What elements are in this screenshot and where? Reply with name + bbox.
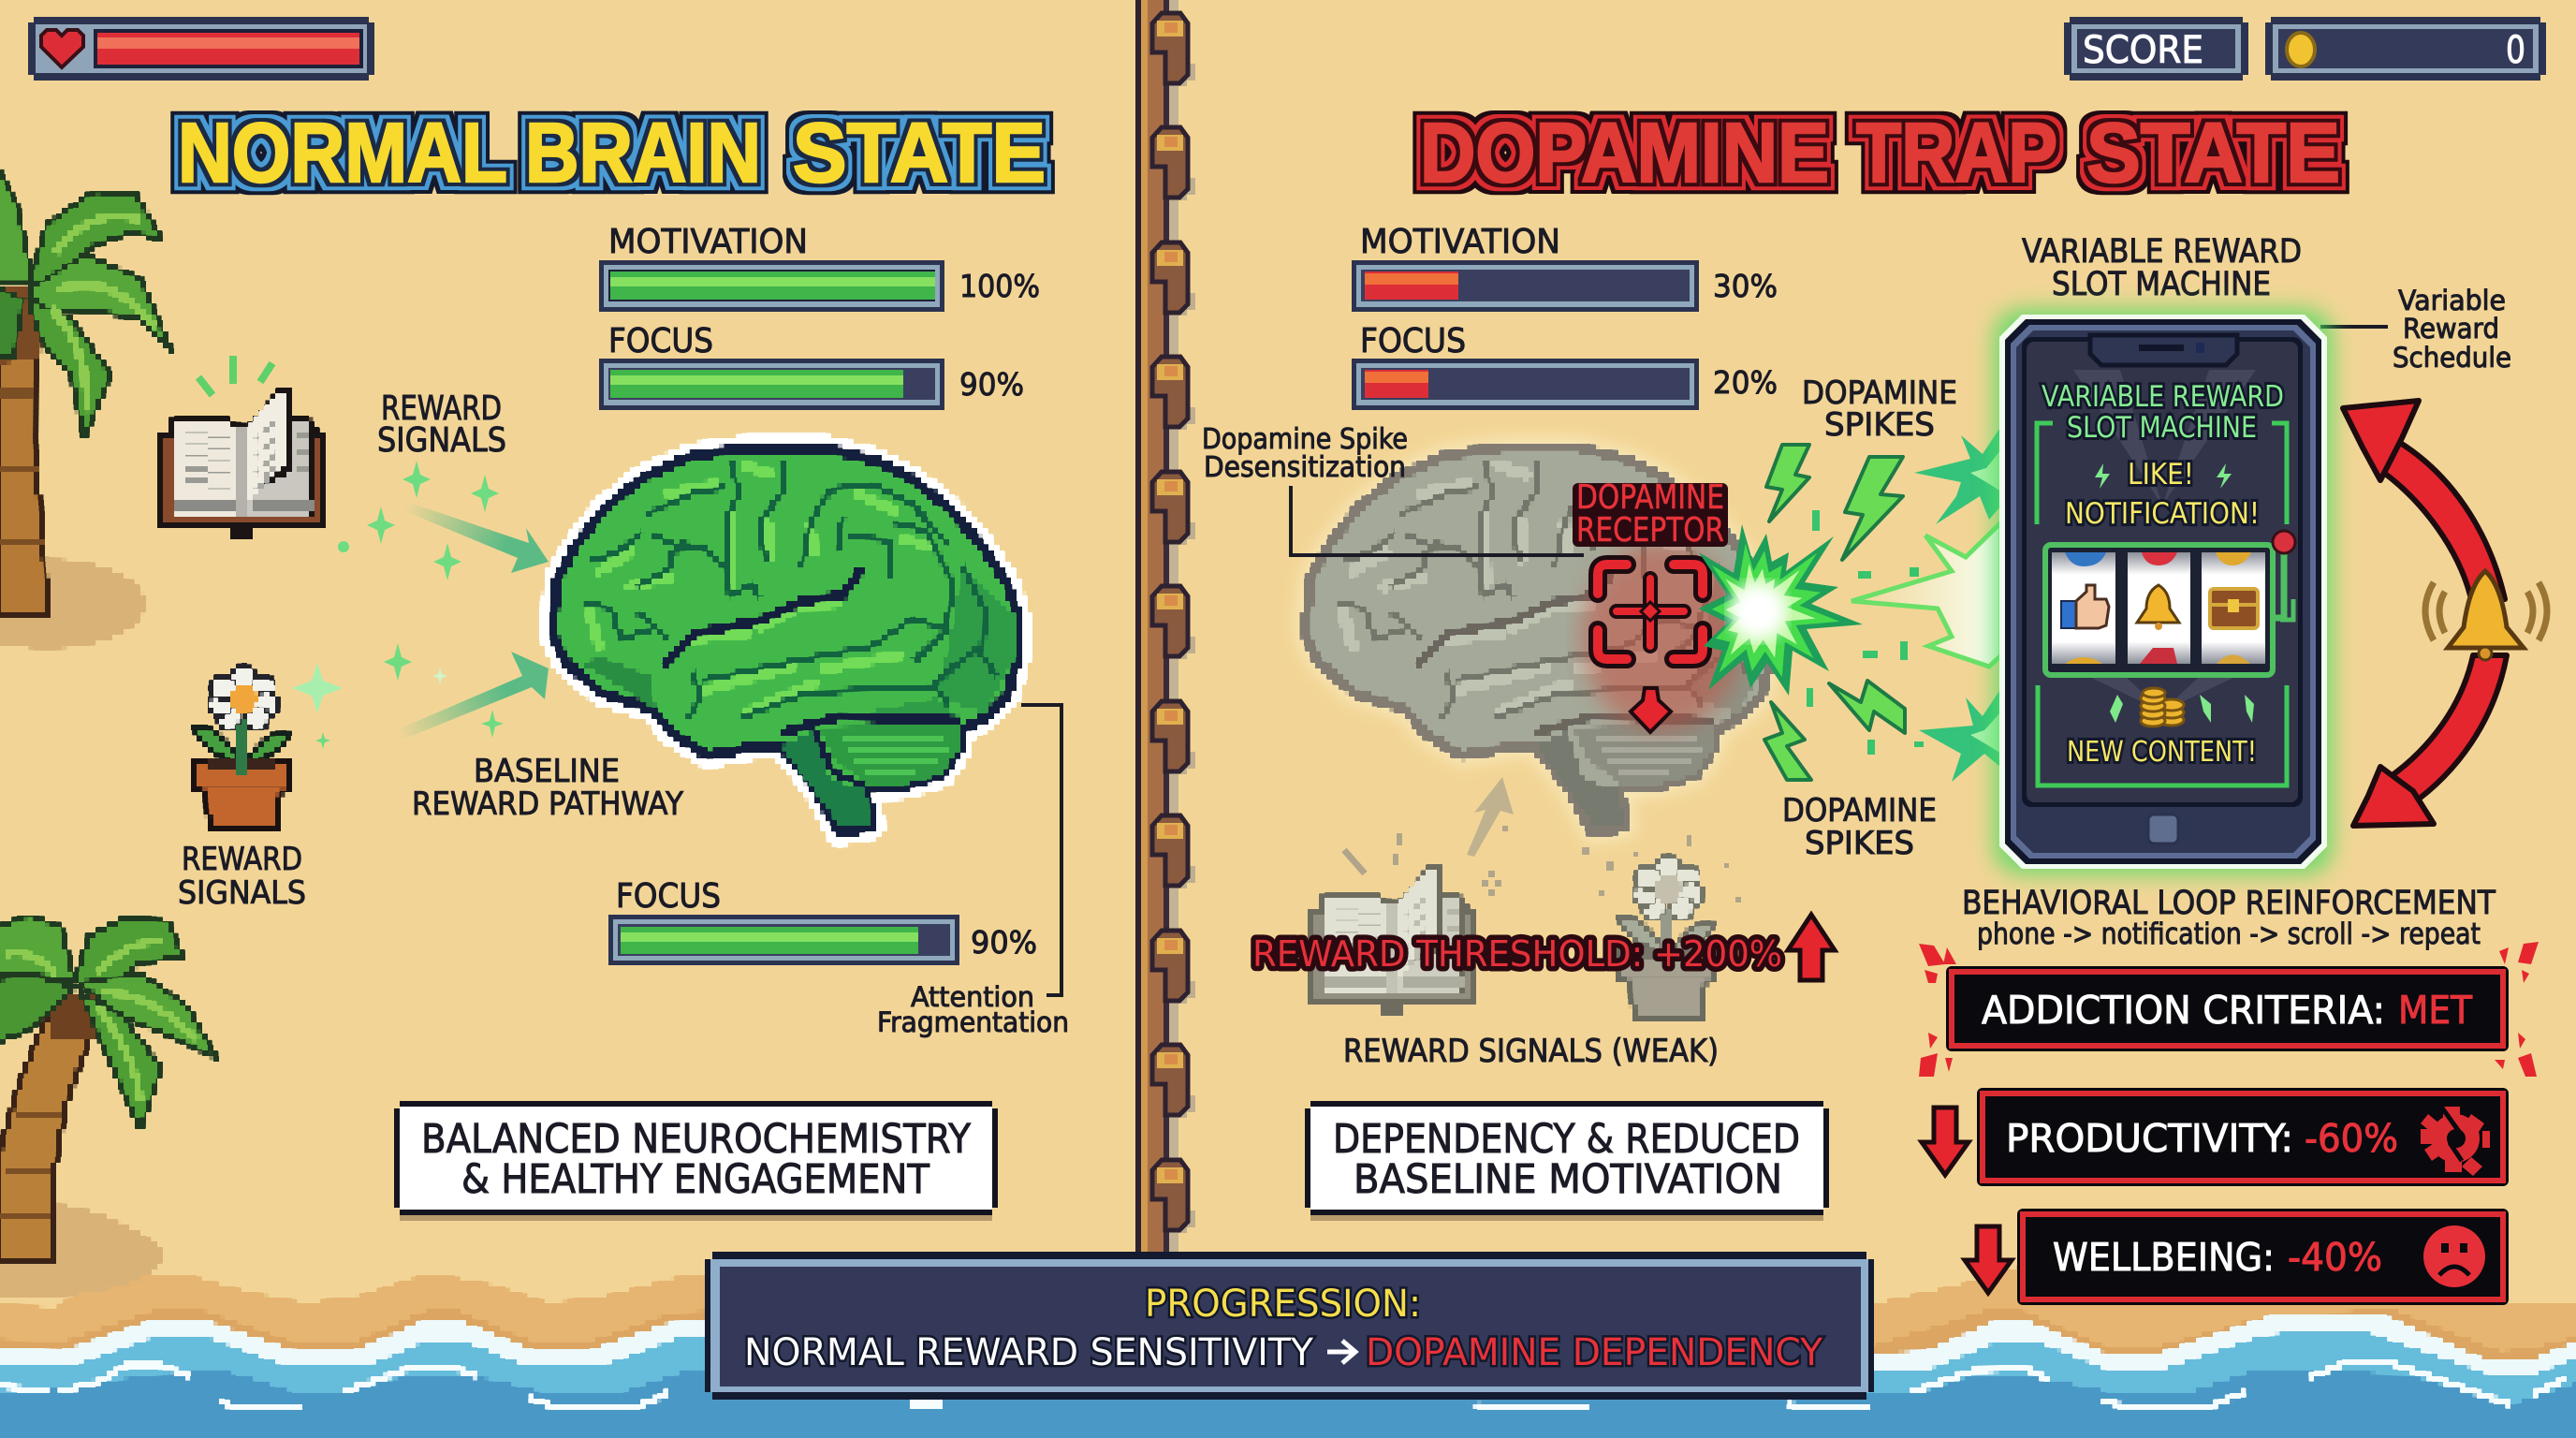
panel: balanced neurochemistry: BALANCED NEUROCHEMISTRY <box>421 1116 972 1163</box>
callout: dopamine spike desensitization <box>1202 423 1584 555</box>
callout: reward threshold: REWARD THRESHOLD: +200% <box>1252 933 1782 975</box>
title: dopamine trap state: TRAP <box>1856 107 2057 200</box>
label: behavioral loop: phone -> notification -> scroll -> repeat <box>1977 917 2481 951</box>
label: dopamine receptor: DOPAMINE <box>1576 478 1724 517</box>
status bar: health <box>28 17 374 81</box>
label: reward signals weak: REWARD SIGNALS (WEAK) <box>1343 1033 1719 1070</box>
phone: slot machine: VARIABLE REWARD <box>2042 380 2284 414</box>
icon: broken gear <box>2421 1107 2490 1176</box>
title: normal brain state: BRAIN <box>525 107 761 200</box>
palm tree: top left <box>0 172 171 649</box>
palm tree: bottom left <box>0 916 216 1299</box>
label: variable reward slot machine: SLOT MACHINE <box>2052 266 2271 303</box>
icon: home button <box>2148 814 2178 844</box>
callout: attention fragmentation: Fragmentation <box>877 1006 1069 1038</box>
panel: progression banner <box>705 1252 1874 1400</box>
label: dopamine spikes lower <box>1782 792 1937 862</box>
phone: slot machine: SLOT MACHINE <box>2067 411 2257 445</box>
label: dopamine receptor: RECEPTOR <box>1576 511 1724 550</box>
panel: productivity: -60% <box>2305 1116 2398 1161</box>
icon: open book <box>159 389 326 537</box>
label: behavioral loop: BEHAVIORAL LOOP REINFORCEMENT <box>1962 885 2496 922</box>
motivation meter: normal: MOTIVATION <box>608 223 808 261</box>
beach and waves <box>0 1255 2576 1438</box>
arrow: upper reward signal <box>402 502 549 573</box>
panel: addiction criteria: ADDICTION CRITERIA: <box>1982 988 2385 1033</box>
focus meter: trap <box>1352 322 1778 410</box>
phone: slot machine <box>1999 315 2327 869</box>
arrow: lower reward signal <box>396 652 549 740</box>
label: dopamine receptor <box>1573 478 1728 550</box>
icon: sad face <box>2423 1225 2485 1287</box>
phone: slot machine: NOTIFICATION! <box>2065 497 2260 531</box>
label: dopamine spikes upper <box>1802 374 1957 444</box>
arrow: loop lower <box>2353 655 2507 826</box>
label: reward signals upper: SIGNALS <box>377 421 506 460</box>
icon: receptor reticle <box>1598 565 1703 659</box>
motivation meter: normal <box>599 223 1040 312</box>
score counter <box>2265 17 2546 81</box>
arrow: receptor down <box>1631 688 1671 732</box>
focus meter: trap: 20% <box>1713 364 1778 401</box>
score counter: 0 <box>2506 29 2525 72</box>
arrow: progression <box>1327 1341 1355 1363</box>
phone green frames <box>2037 423 2287 785</box>
book sparks <box>198 356 272 395</box>
panel: wellbeing: WELLBEING: <box>2053 1235 2275 1280</box>
panel: productivity <box>1977 1088 2509 1186</box>
phone: slot machine: NEW CONTENT! <box>2067 736 2257 769</box>
motivation meter: trap: 30% <box>1713 268 1778 304</box>
panel: dependency: BASELINE MOTIVATION <box>1354 1156 1782 1203</box>
icon: coins <box>2141 688 2184 726</box>
lightning bolts <box>1764 445 1905 780</box>
panel: wellbeing <box>2017 1209 2509 1305</box>
motivation meter: normal: 100% <box>959 268 1040 304</box>
phone glow <box>1994 309 2333 874</box>
label: baseline reward pathway <box>412 753 683 823</box>
icon: faded flower <box>1619 857 1714 1017</box>
icon: chest <box>2210 589 2258 628</box>
icon: flower in pot <box>195 667 289 827</box>
label: dopamine spikes upper: SPIKES <box>1824 406 1935 444</box>
title: dopamine trap state <box>1420 107 2340 200</box>
sparkles: green reward signals <box>292 461 504 749</box>
label: dopamine spikes lower: SPIKES <box>1805 825 1914 862</box>
label: variable reward slot machine <box>2022 233 2302 303</box>
label: variable reward slot machine: VARIABLE REWARD <box>2022 233 2302 271</box>
motivation meter: trap <box>1352 223 1778 312</box>
arrow: wellbeing down <box>1965 1226 2012 1293</box>
green energy from phone <box>1852 426 2001 782</box>
red receptor glow <box>1582 543 1741 730</box>
arrow: loop upper <box>2343 401 2505 599</box>
callout: dopamine spike desensitization: Dopamine Spike <box>1202 423 1408 456</box>
brain: healthy green <box>553 448 1017 833</box>
callout: reward threshold <box>1252 915 1835 980</box>
score box: SCORE <box>2083 29 2203 72</box>
screen rays <box>2073 370 2256 712</box>
focus meter: normal lower: FOCUS <box>616 877 721 916</box>
icon: thumbs up <box>2061 585 2109 628</box>
focus meter: normal upper <box>599 322 1024 410</box>
panel: progression banner: NORMAL REWARD SENSITIVITY <box>744 1331 1314 1374</box>
title: normal brain state <box>178 107 1046 200</box>
panel: progression banner: DOPAMINE DEPENDENCY <box>1366 1331 1823 1374</box>
title: normal brain state: STATE <box>793 107 1046 200</box>
slot machine reels <box>2045 545 2273 675</box>
label: reward signals upper: REWARD <box>381 389 502 428</box>
slot lever <box>2273 531 2295 620</box>
focus meter: normal lower <box>608 877 1037 965</box>
callout: variable reward schedule <box>2320 285 2511 374</box>
icon: ringing bell <box>2425 571 2547 660</box>
title: normal brain state: NORMAL <box>178 107 507 200</box>
faded arrow to brain <box>1467 777 1514 857</box>
panel: dependency: DEPENDENCY & REDUCED <box>1333 1116 1800 1163</box>
callout: dopamine spike desensitization: Desensitization <box>1204 451 1406 484</box>
title: dopamine trap state: STATE <box>2086 107 2340 200</box>
panel: balanced neurochemistry: & HEALTHY ENGAGEMENT <box>461 1156 930 1203</box>
icon: heart <box>41 30 83 67</box>
red shards <box>1919 942 2539 1077</box>
label: baseline reward pathway: REWARD PATHWAY <box>412 785 683 823</box>
callout: variable reward schedule: Reward <box>2403 313 2499 345</box>
focus meter: normal upper: 90% <box>959 366 1024 403</box>
callout: variable reward schedule: Schedule <box>2393 342 2511 374</box>
brain: desensitized grey <box>1307 448 1771 833</box>
debris particles <box>1344 826 1741 902</box>
panel: addiction criteria <box>1946 966 2509 1051</box>
panel: addiction criteria: MET <box>2398 988 2473 1033</box>
title: dopamine trap state: DOPAMINE <box>1420 107 1829 200</box>
arrow: productivity down <box>1922 1108 1969 1175</box>
panel: balanced neurochemistry <box>394 1101 998 1221</box>
divider: wooden rope post <box>1135 0 1195 1255</box>
motivation meter: trap: MOTIVATION <box>1360 223 1560 261</box>
label: reward signals upper <box>377 389 506 460</box>
panel: dependency <box>1305 1101 1829 1221</box>
panel: productivity: PRODUCTIVITY: <box>2006 1116 2293 1161</box>
label: dopamine spikes upper: DOPAMINE <box>1802 374 1957 412</box>
callout: attention fragmentation <box>877 705 1069 1038</box>
brain halo <box>1307 448 1771 833</box>
burst: dopamine explosion <box>1699 524 1863 696</box>
icon: coin <box>2287 33 2315 66</box>
score box <box>2064 17 2248 81</box>
label: behavioral loop <box>1962 885 2496 951</box>
label: reward signals lower: REWARD <box>182 841 302 878</box>
label: dopamine spikes lower: DOPAMINE <box>1782 792 1937 829</box>
phone notch <box>2090 335 2237 365</box>
focus meter: normal lower: 90% <box>971 924 1037 961</box>
focus meter: trap: FOCUS <box>1360 322 1466 360</box>
callout: attention fragmentation: Attention <box>911 981 1034 1013</box>
panel: wellbeing: -40% <box>2288 1235 2382 1280</box>
focus meter: normal upper: FOCUS <box>608 322 713 360</box>
phone: slot machine: LIKE! <box>2128 458 2194 492</box>
callout: variable reward schedule: Variable <box>2398 285 2506 316</box>
label: reward signals lower <box>178 841 306 912</box>
icon: slot bell <box>2137 585 2179 630</box>
panel: progression banner: PROGRESSION: <box>1145 1283 1421 1326</box>
label: baseline reward pathway: BASELINE <box>474 753 620 790</box>
label: reward signals lower: SIGNALS <box>178 874 306 912</box>
green debris <box>1807 510 1924 755</box>
icon: faded book <box>1310 865 1476 1014</box>
